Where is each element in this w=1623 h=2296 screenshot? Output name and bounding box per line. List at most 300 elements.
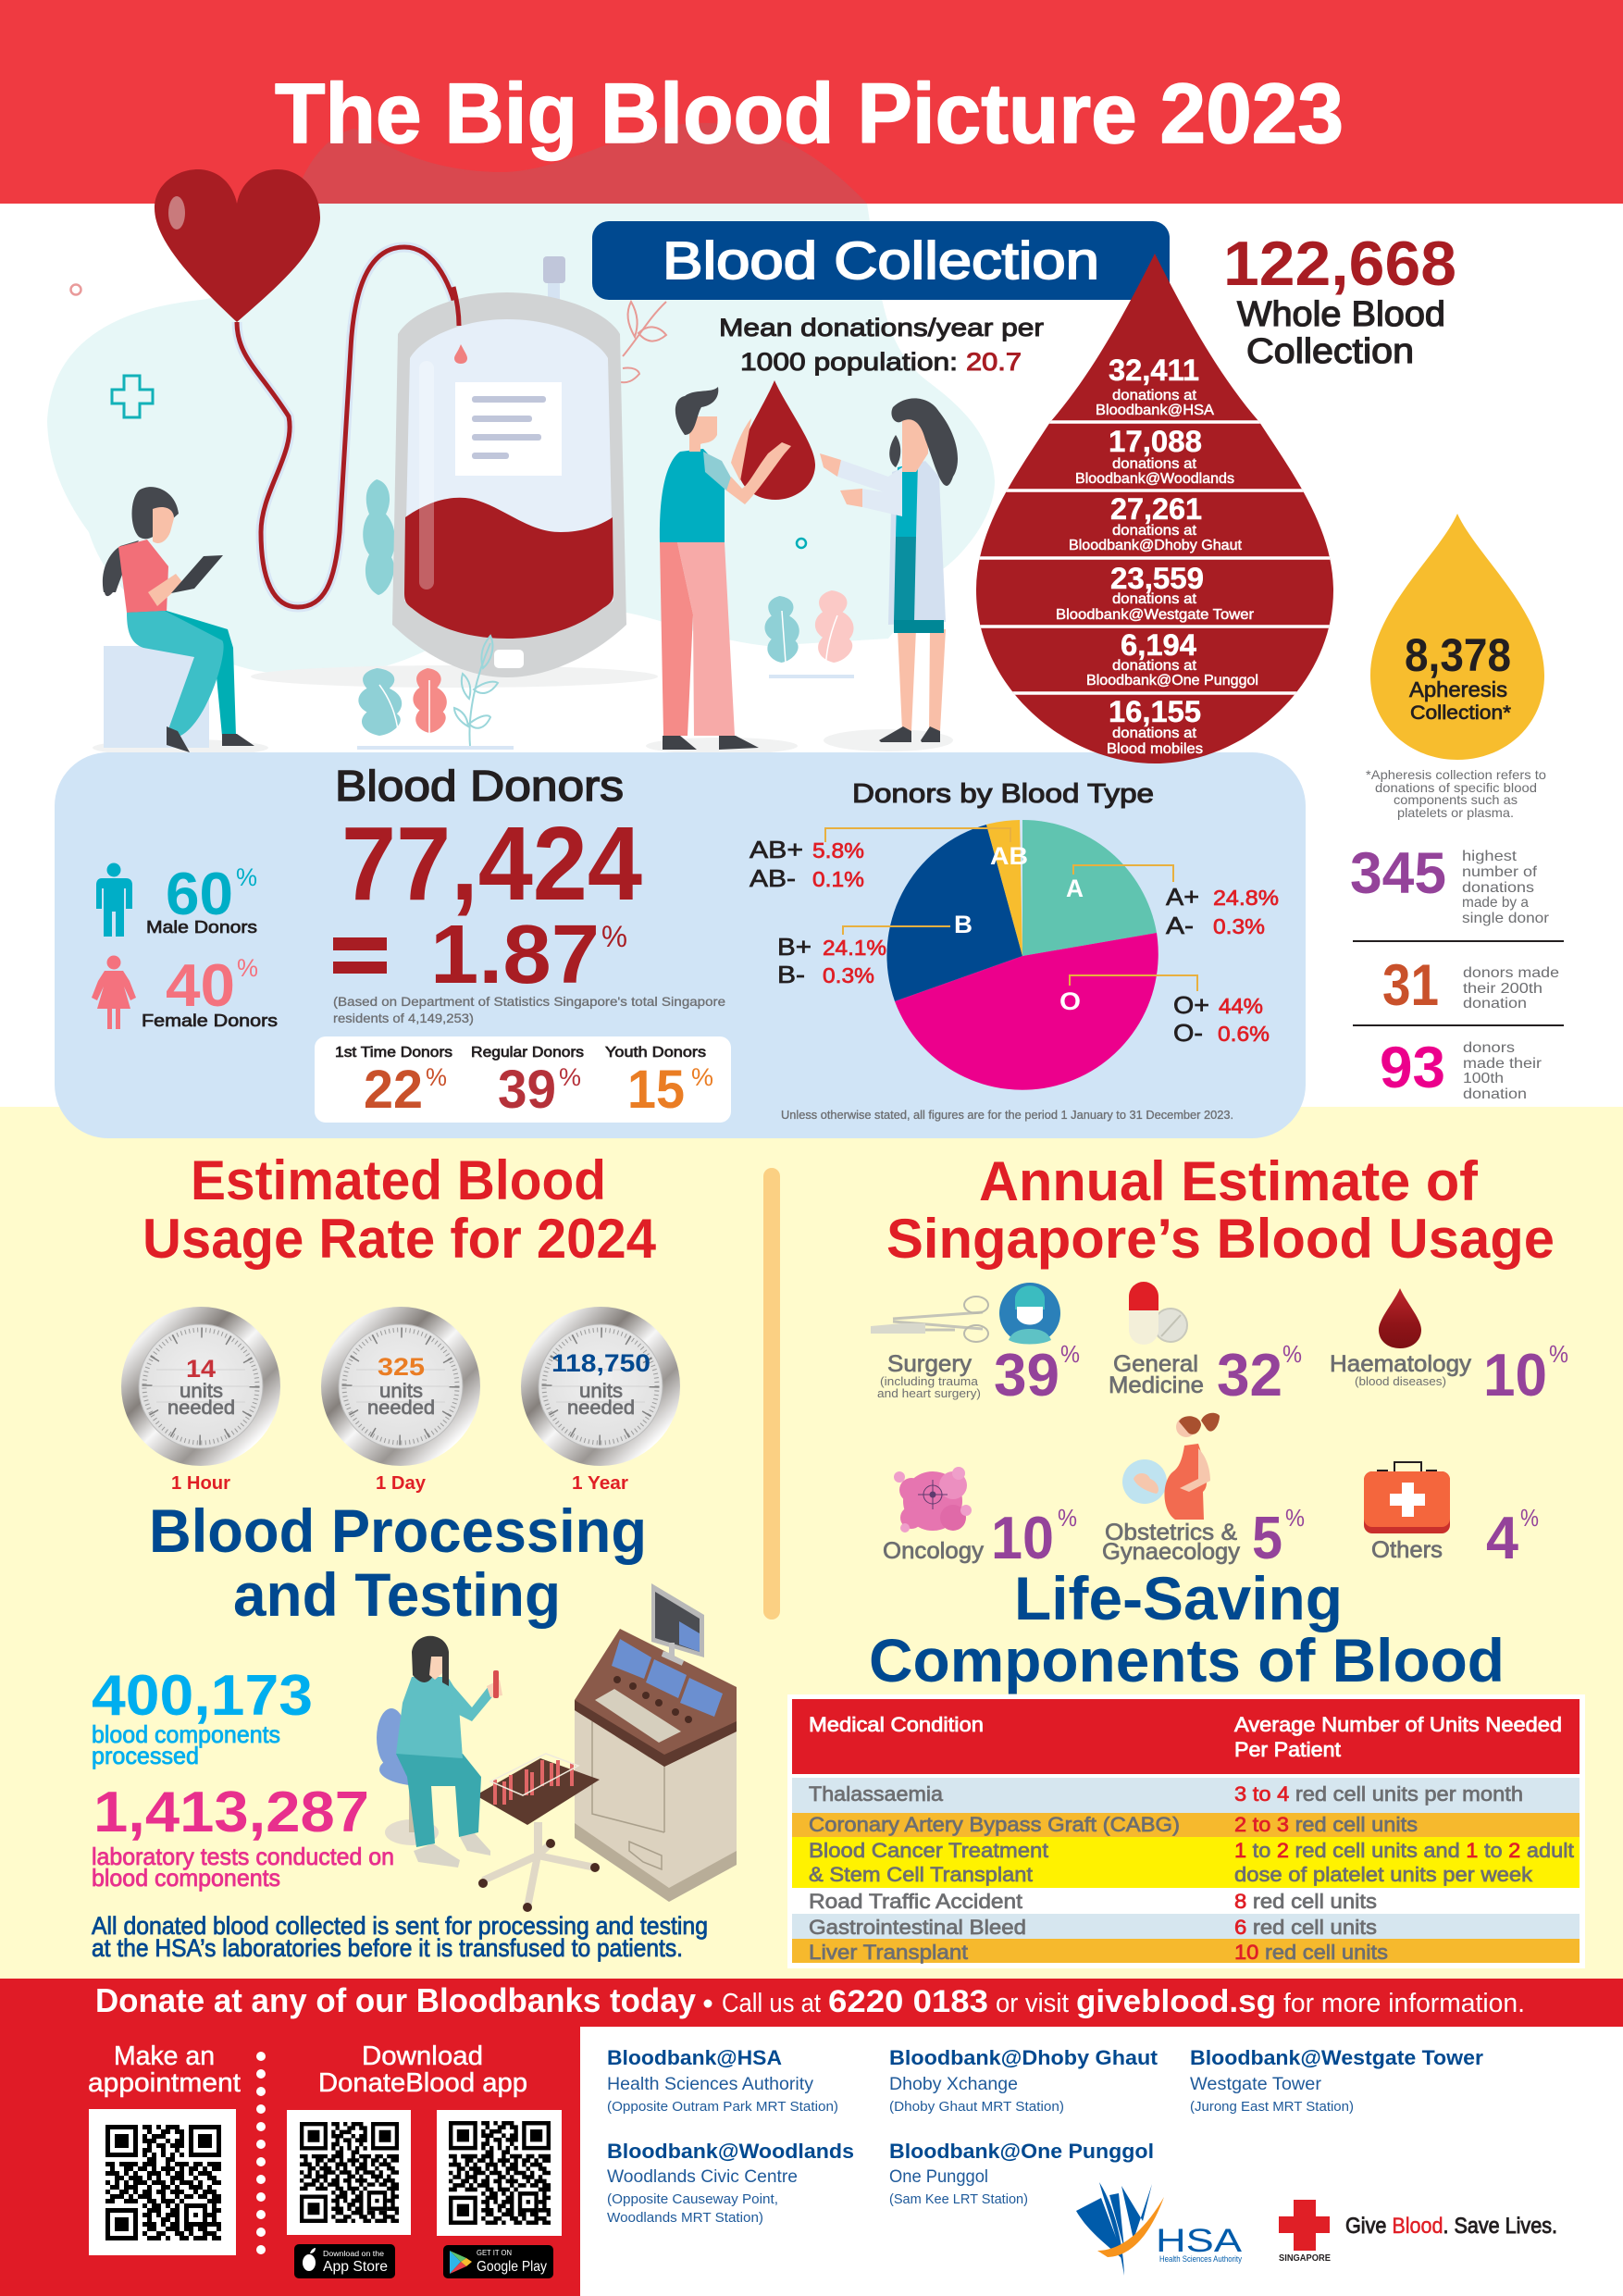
stat: 1.87%: % [601,920,627,953]
address: Woodlands: Woodlands Civic Centre [607,2167,798,2187]
stat: 1,413,287: blood components [92,1864,280,1892]
logo: HSA [1076,2182,1243,2276]
address: Bloodbank@HSA: Bloodbank@HSA [607,2046,782,2069]
make an appointment: Make an [114,2042,215,2071]
title: The Big Blood Picture 2023 [275,67,1344,161]
usage: oncology [883,1467,1077,1571]
pie chart: O [1059,987,1081,1015]
icon: pregnant woman and baby [1122,1413,1220,1520]
man [660,380,815,750]
site: mobiles: donations at [1112,726,1197,741]
dotted separator [256,2052,266,2254]
site: Dhoby Ghaut: Bloodbank@Dhoby Ghaut [1069,538,1243,553]
gauge: 1 year: needed [567,1397,635,1419]
plants under bag [357,636,514,750]
usage: haematology: 10 [1483,1341,1547,1409]
legend: AB: AB+ [750,836,803,863]
row: CABG: Coronary Artery Bypass Graft (CABG) [809,1813,1180,1836]
apheresis footnote: platelets or plasma. [1397,805,1514,820]
card: donor types: 15 [627,1060,685,1120]
usage: obstetrics: 5 [1252,1504,1282,1571]
usage: surgery [871,1283,1080,1409]
bag inner [404,319,613,639]
row: blood cancer [792,1837,1580,1888]
footer band [0,1979,1623,2296]
badge: google play: Google Play [477,2259,547,2275]
address: Dhoby Ghaut [889,2046,1158,2115]
address: Woodlands [607,2140,854,2226]
stat: 345: 345 [1350,841,1446,906]
footer call to action: 6220 0183 [828,1984,988,2019]
usage: general medicine: % [1282,1340,1302,1368]
legend: O: 0.6% [1218,1022,1270,1046]
badge: app store [294,2244,395,2278]
legend: A: 24.8% [1213,886,1279,910]
stat: 31: donors made [1463,965,1559,981]
address: Bloodbank@HSA: Health Sciences Authority [607,2075,814,2094]
gauge: 1 hour: 14 [186,1355,216,1383]
usage: obstetrics: Gynaecology [1102,1539,1240,1565]
heading: Annual Estimate [886,1150,1555,1270]
row: road traffic accident: Road Traffic Accident [809,1890,1022,1913]
heading: Blood Donors: Blood Donors [335,762,624,810]
legend: A: A+ [1166,883,1199,911]
site: HSA [1096,354,1214,418]
stat: 400,173: 400,173 [92,1664,313,1728]
icon: cancer cell [894,1467,972,1533]
text: processing note: at the HSA’s laboratories before it is transfused to patients. [92,1934,683,1962]
site: Woodlands [1075,425,1234,487]
logo: Singapore Red Cross [1279,2200,1331,2264]
site: Dhoby Ghaut: 27,261 [1110,492,1202,526]
divider [763,1168,780,1620]
leaf behind bag [363,479,395,595]
gauge: 1 hour [121,1307,280,1494]
gauge: 1 year: 118,750 [551,1349,650,1377]
icon: male figure [96,863,132,937]
heading: Annual Estimate: Singapore’s Blood Usage [886,1208,1555,1270]
stat: male 60%: % [236,863,257,891]
card: donor types: % [691,1063,713,1091]
site: Westgate Tower [1056,562,1255,623]
icon: surgeon [999,1283,1060,1344]
row: blood cancer: dose of platelet units per week [1234,1863,1533,1886]
stat: 31: 31 [1382,953,1439,1018]
usage: surgery: (including trauma [880,1374,979,1388]
site: Woodlands: donations at [1112,456,1197,472]
gauge: 1 hour: needed [167,1397,235,1419]
sample table [476,1754,600,1912]
text: mean donations: 1000 population: [740,348,958,376]
usage: oncology: Oncology [883,1538,985,1564]
stat: 1,413,287: 1,413,287 [93,1781,369,1844]
illustration: blood bag and donors [70,169,958,756]
site: HSA: Bloodbank@HSA [1096,403,1214,418]
usage: haematology [1330,1288,1568,1409]
heading: Life-Saving Components of Blood: Life-Saving [1014,1564,1343,1632]
table header [792,1699,1580,1774]
heading: Life-Saving Components of Blood [869,1564,1505,1694]
usage: oncology: % [1058,1504,1077,1532]
stat: 93 [1380,1036,1542,1102]
gauge: 1 hour: 1 Hour [171,1473,230,1494]
row: liver transplant: 10 red cell units [1234,1941,1388,1964]
stat: 31 [1382,953,1559,1018]
site: HSA: 32,411 [1109,354,1199,387]
stat: 31: donation [1463,996,1527,1011]
usage: surgery: and heart surgery) [877,1386,981,1400]
legend: B: 0.3% [823,963,874,987]
held blood drop [737,380,815,500]
blood in bag [404,498,613,639]
stat: 77,424: 77,424 [341,805,642,922]
gauge: 1 day: 1 Day [376,1473,427,1494]
download the app: DonateBlood app [318,2068,527,2098]
heading: Life-Saving Components of Blood: Components of Blood [869,1626,1505,1694]
icon: female figure [92,955,136,1029]
gauge: 1 day: needed [367,1397,435,1419]
heading: Blood Processing and Testing [149,1496,647,1629]
bag bottom port [494,650,524,668]
stat: 345: single donor [1462,911,1550,926]
make an appointment: appointment [88,2068,241,2098]
address: Woodlands: Bloodbank@Woodlands [607,2140,854,2163]
address: Westgate Tower: Bloodbank@Westgate Tower [1190,2046,1483,2069]
stat: 93: 93 [1380,1036,1445,1100]
usage: oncology: 10 [991,1504,1054,1571]
ground shadows [93,665,953,756]
text: mean donations: 20.7 [966,348,1022,376]
yellow drop: apheresis: Apheresis [1409,677,1507,701]
yellow drop: apheresis [1370,514,1544,760]
site: Dhoby Ghaut: donations at [1112,523,1197,539]
footer call to action: giveblood.sg [1076,1984,1276,2019]
address: One Punggol: One Punggol [889,2167,988,2187]
stat: 1.87% [333,909,627,1001]
woman seated with clipboard [103,487,254,752]
usage: obstetrics: Obstetrics & [1105,1520,1237,1545]
stat: male 60%: 60 [166,860,233,927]
address: One Punggol: (Sam Kee LRT Station) [889,2191,1028,2207]
note: period: Unless otherwise stated, all figures are for the period 1 January to 31 December 2023. [781,1108,1233,1122]
stat: female 40% [142,951,278,1030]
big drop: collection by site [962,254,1351,763]
bag label [455,382,562,476]
legend: O: 44% [1219,994,1263,1018]
usage: surgery: % [1060,1340,1080,1368]
card: donor types [315,1036,731,1123]
site: Woodlands: Bloodbank@Woodlands [1075,471,1234,487]
usage: obstetrics [1102,1413,1305,1571]
text: processing note: All donated blood collected is sent for processing and testing [92,1912,708,1940]
row: gastrointestinal bleed: 6 red cell units [1234,1916,1377,1939]
stat: 400,173: processed [92,1742,199,1769]
usage: haematology: % [1549,1340,1568,1368]
legend: AB: AB- [750,864,796,892]
small blood drop [454,344,467,364]
address: Dhoby Ghaut: Bloodbank@Dhoby Ghaut [889,2046,1158,2069]
heart [155,169,320,322]
download the app [287,2042,562,2278]
row: CABG [792,1813,1580,1837]
plants right [764,590,854,678]
heading: Annual Estimate: Annual Estimate of [979,1150,1479,1212]
address: Dhoby Ghaut: Dhoby Xchange [889,2075,1018,2094]
address: One Punggol [889,2140,1154,2207]
gauge: 1 year: 1 Year [572,1473,628,1494]
icon: surgical tools [871,1297,988,1342]
stat: 345: donations [1462,880,1534,896]
stat: 31: their 200th [1463,981,1542,997]
address: Bloodbank@HSA [607,2046,838,2115]
card: donor types: % [559,1063,581,1091]
stat: whole blood collection: Whole Blood [1237,295,1445,334]
card: donor types: Regular Donors [471,1045,584,1061]
site: Woodlands: 17,088 [1109,425,1202,458]
stat: female 40%: Female Donors [142,1011,278,1030]
logo: HSA: Health Sciences Authority [1159,2254,1242,2264]
logo: Singapore Red Cross: SINGAPORE [1279,2253,1331,2264]
icon: first aid kit [1364,1462,1450,1533]
usage: others: 4 [1486,1504,1518,1571]
legend: A: A- [1166,912,1194,939]
analyser machine [575,1583,737,1902]
text: mean donations: Mean donations/year per [719,314,1044,341]
usage: haematology: Haematology [1330,1351,1472,1377]
make an appointment [88,2042,241,2255]
site: mobiles: Blood mobiles [1107,741,1203,757]
card: donor types: 1st Time Donors [335,1045,452,1061]
gauge: 1 year [521,1307,680,1494]
gauge: 1 year: units [579,1381,623,1402]
heading: Blood Processing and Testing: Blood Processing [149,1496,647,1565]
footer address panel [580,2027,1623,2296]
usage: surgery: 39 [994,1341,1059,1409]
legend: B [777,933,886,988]
stat: 1.87%: 1.87 [430,909,600,1001]
address: Woodlands: (Opposite Causeway Point, [607,2191,778,2207]
header band [0,0,1623,204]
card: donor types: 22 [364,1060,423,1120]
usage: obstetrics: % [1285,1504,1305,1532]
stat: female 40%: % [237,954,258,982]
address: Dhoby Ghaut: (Dhoby Ghaut MRT Station) [889,2099,1064,2115]
stat: 345: made by a [1462,895,1529,911]
yellow lower section background [0,1107,1623,1979]
stat: 345: highest [1462,849,1518,864]
site: One Punggol: 6,194 [1121,628,1196,662]
card: donor types: 39 [498,1060,556,1120]
stat: 1,413,287: laboratory tests conducted on [92,1843,394,1870]
card: donor types: Youth Donors [605,1045,706,1061]
note: population base [333,994,725,1025]
site: One Punggol: donations at [1112,658,1197,674]
legend: B: B+ [777,933,812,961]
address: Westgate Tower: Westgate Tower [1190,2075,1322,2094]
row: blood cancer: & Stem Cell Transplant [809,1863,1033,1886]
bag port [543,256,565,318]
nurse [377,1636,502,1868]
yellow drop: apheresis: 8,378 [1405,629,1511,681]
stat: 1,413,287 [92,1781,394,1892]
pie chart: AB [990,842,1028,870]
stat: 93: donors [1463,1040,1515,1056]
legend: B: 24.1% [823,936,886,960]
download the app: Download [362,2042,483,2071]
site: mobiles: 16,155 [1109,695,1201,728]
usage: haematology: (blood diseases) [1355,1374,1446,1388]
note: population base: (Based on Department of Statistics Singapore's total Singapore [333,994,725,1009]
stat: 93: made their [1463,1056,1542,1072]
site: Westgate Tower: donations at [1112,591,1197,607]
panel: blood donors [55,752,1306,1138]
row: blood cancer: Blood Cancer Treatment [809,1839,1048,1862]
stat: female 40%: 40 [166,951,235,1019]
stat: whole blood collection: 122,668 [1223,229,1456,299]
site: mobiles [1107,695,1203,757]
table header: Per Patient [1234,1738,1341,1761]
stat: 345 [1350,841,1550,926]
header blob overlay [295,123,867,204]
stat: male 60% [146,860,257,937]
stat: 400,173: blood components [92,1720,280,1748]
stat: 400,173 [92,1664,313,1769]
usage: others [1364,1462,1539,1571]
row: gastrointestinal bleed: Gastrointestinal Bleed [809,1916,1026,1939]
footer call to action [95,1981,1525,2019]
site: Westgate Tower: Bloodbank@Westgate Tower [1056,607,1255,623]
row: road traffic accident [792,1888,1580,1914]
QR code: app store [300,2122,399,2223]
usage: general medicine: General [1113,1351,1198,1377]
legend: AB: 0.1% [812,867,864,891]
bag highlight [419,361,434,590]
bag outer [392,292,626,677]
legend: A: 0.3% [1213,914,1265,938]
pie chart [825,820,1197,1090]
background blob [47,123,995,676]
logo: HSA: HSA [1156,2223,1243,2259]
stat: whole blood collection: Collection [1246,332,1414,371]
QR code: google play [449,2121,551,2225]
banner: Blood Collection [592,221,1170,300]
apheresis footnote: donations of specific blood [1375,780,1537,795]
stat: 93: donation [1463,1086,1527,1102]
footer call to action: Donate at any of our Bloodbanks today [95,1981,696,2019]
card: donor types: % [426,1063,447,1091]
site: Westgate Tower: 23,559 [1110,562,1204,595]
heading: Blood Processing and Testing: and Testing [233,1560,561,1629]
yellow drop: apheresis: Collection* [1410,702,1511,724]
legend: AB [750,836,864,892]
pink branch [621,302,666,382]
legend: AB: 5.8% [812,838,864,863]
badge: app store: Download on the [323,2250,385,2258]
tagline: Give Blood. Save Lives. [1345,2214,1557,2239]
icon: pill and tablet [1129,1282,1187,1345]
usage: surgery: Surgery [887,1351,973,1377]
footer call to action: Call us at [722,1989,821,2018]
heading: Estimated Blood Usage Rate: Usage Rate for 2024 [142,1208,657,1270]
table header: Medical Condition [809,1713,984,1736]
row: gastrointestinal bleed [792,1914,1580,1939]
apheresis footnote: *Apheresis collection refers to [1366,767,1546,782]
apheresis footnote: components such as [1394,792,1518,807]
pie chart: B [954,911,973,938]
tube end [453,287,459,326]
legend: O: O- [1173,1019,1203,1047]
row: liver transplant [792,1939,1580,1964]
usage: general medicine: Medicine [1109,1372,1204,1398]
usage: general medicine [1109,1282,1302,1409]
site: Dhoby Ghaut [1069,492,1243,553]
badge: app store: App Store [323,2259,388,2275]
table: units needed [787,1694,1585,1968]
address: Bloodbank@HSA: (Opposite Outram Park MRT Station) [607,2099,838,2115]
badge: google play: GET IT ON [477,2249,512,2257]
site: One Punggol [1086,628,1258,689]
note: population base: residents of 4,149,253) [333,1011,474,1025]
footer call to action: or visit [996,1989,1069,2018]
badge: google play [443,2245,553,2278]
row: blood cancer: 1 to 2 red cell units and 1 to 2 adult [1234,1839,1574,1862]
heart highlight [168,196,185,230]
usage: others: Others [1371,1537,1443,1563]
heading: Blood Collection: Blood Collection [663,231,1099,291]
address: Westgate Tower: (Jurong East MRT Station) [1190,2099,1354,2115]
QR code: appointment [105,2125,221,2240]
tube halo [237,247,459,607]
row: liver transplant: Liver Transplant [809,1941,968,1964]
gauge: 1 day: units [379,1381,423,1402]
row: road traffic accident: 8 red cell units [1234,1890,1377,1913]
usage: general medicine: 32 [1217,1341,1282,1409]
heading: Donors by Blood Type: Donors by Blood Type [852,779,1154,809]
illustration: lab nurse and machine [377,1583,737,1912]
text: mean donations [719,314,1044,376]
address: Westgate Tower [1190,2046,1483,2115]
row: Thalassaemia: Thalassaemia [809,1782,944,1806]
address: Woodlands: Woodlands MRT Station) [607,2210,763,2226]
footer call to action: for more information. [1283,1989,1525,2018]
row: CABG: 2 to 3 red cell units [1234,1813,1418,1836]
pie chart: A [1066,875,1084,902]
legend: O [1173,991,1270,1047]
heading: Estimated Blood Usage Rate: Estimated Blood [191,1149,606,1211]
table header: Average Number of Units Needed [1234,1713,1562,1736]
text: processing note [92,1912,708,1962]
row: Thalassaemia [792,1778,1580,1813]
gauge: 1 day [321,1307,480,1494]
usage: others: % [1520,1504,1539,1532]
blood tube [237,247,459,607]
legend: O: O+ [1173,991,1209,1019]
stat: male 60%: Male Donors [146,918,257,937]
stat: 345: number of [1462,864,1538,880]
icon: blood drop [1379,1288,1421,1348]
stat: 93: 100th [1463,1071,1504,1086]
site: One Punggol: Bloodbank@One Punggol [1086,673,1258,689]
apheresis footnote [1366,767,1546,820]
row: Thalassaemia: 3 to 4 red cell units per month [1234,1782,1523,1806]
gauge: 1 hour: units [180,1381,223,1402]
address: One Punggol: Bloodbank@One Punggol [889,2140,1154,2163]
doctor [820,398,958,742]
heading: Estimated Blood Usage Rate [142,1149,657,1270]
decorative rings and cross [70,285,806,548]
legend: A [1166,883,1279,939]
site: HSA: donations at [1112,388,1197,403]
